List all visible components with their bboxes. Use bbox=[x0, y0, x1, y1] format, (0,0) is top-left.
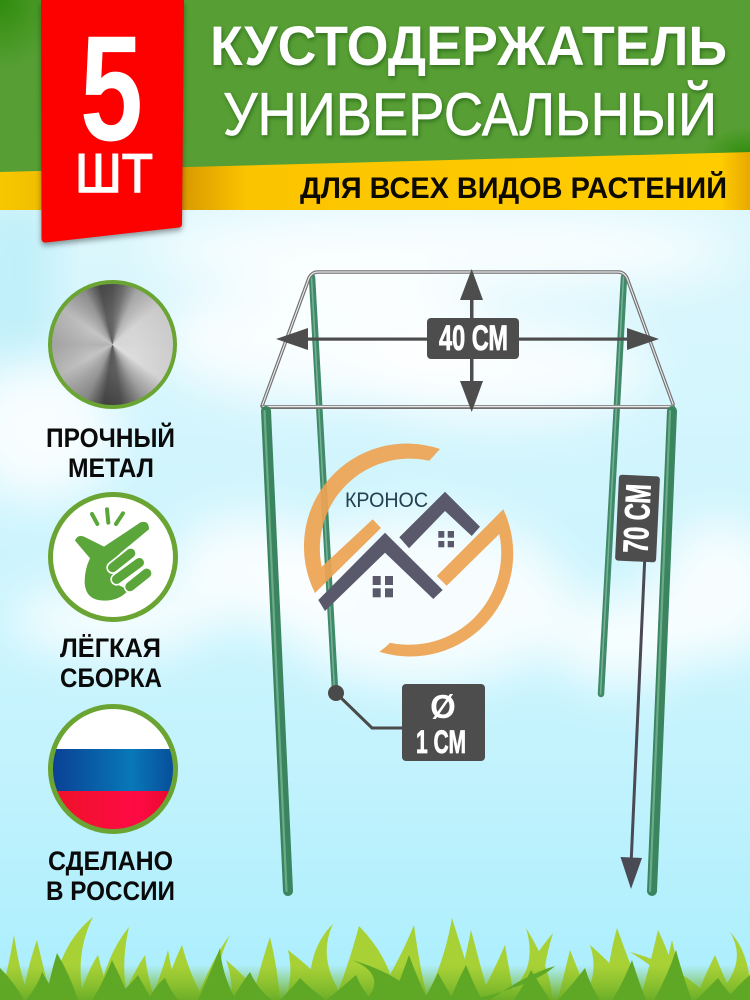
grass: dark blades bbox=[0, 948, 750, 1000]
badge number: 5 bbox=[80, 4, 143, 172]
grass bbox=[0, 917, 750, 1000]
header: green band and yellow strip bbox=[0, 0, 750, 210]
dimension: 70 cm arrow bbox=[615, 475, 660, 889]
metal top frame bbox=[262, 272, 673, 407]
icon: russian flag bbox=[50, 705, 176, 836]
label: made in russia: В РОССИИ bbox=[46, 876, 175, 906]
label: strong metal: МЕТАЛ bbox=[68, 453, 154, 483]
badge unit: ШТ bbox=[75, 142, 153, 204]
label: easy assembly: СБОРКА bbox=[60, 663, 162, 693]
logo: kronos bbox=[304, 444, 513, 656]
callout: diameter 1 cm: Ø bbox=[430, 688, 456, 725]
back rear posts bbox=[312, 277, 624, 694]
plant support frame bbox=[262, 272, 673, 891]
front posts bbox=[264, 411, 672, 891]
grass: light blades bbox=[0, 917, 750, 1000]
grass: base haze bbox=[0, 965, 750, 1000]
callout: diameter 1 cm: 1 СМ bbox=[416, 724, 466, 760]
label: easy assembly: ЛЁГКАЯ bbox=[60, 633, 161, 663]
callout: diameter 1 cm bbox=[328, 684, 485, 761]
label: strong metal: ПРОЧНЫЙ bbox=[46, 422, 175, 453]
label: 40 cm: 40 СМ bbox=[439, 319, 508, 358]
title bbox=[210, 14, 727, 148]
icon: finger snap bbox=[50, 494, 176, 620]
logo: kronos: КРОНОС bbox=[345, 489, 428, 512]
dimension: 40 cm arrows bbox=[276, 269, 659, 412]
icon: brushed metal disc bbox=[48, 280, 177, 409]
label: strong metal bbox=[46, 422, 175, 483]
red badge bbox=[41, 0, 184, 243]
label: made in russia: СДЕЛАНО bbox=[48, 846, 173, 876]
label: made in russia bbox=[46, 846, 175, 906]
label: 70 cm: 70 СМ bbox=[616, 483, 659, 554]
title: КУСТОДЕРЖАТЕЛЬ bbox=[210, 14, 727, 77]
subtitle: ДЛЯ ВСЕХ ВИДОВ РАСТЕНИЙ bbox=[300, 171, 727, 205]
label: 70 cm bbox=[615, 475, 660, 562]
label: easy assembly bbox=[60, 633, 162, 693]
label: 40 cm bbox=[427, 318, 519, 359]
